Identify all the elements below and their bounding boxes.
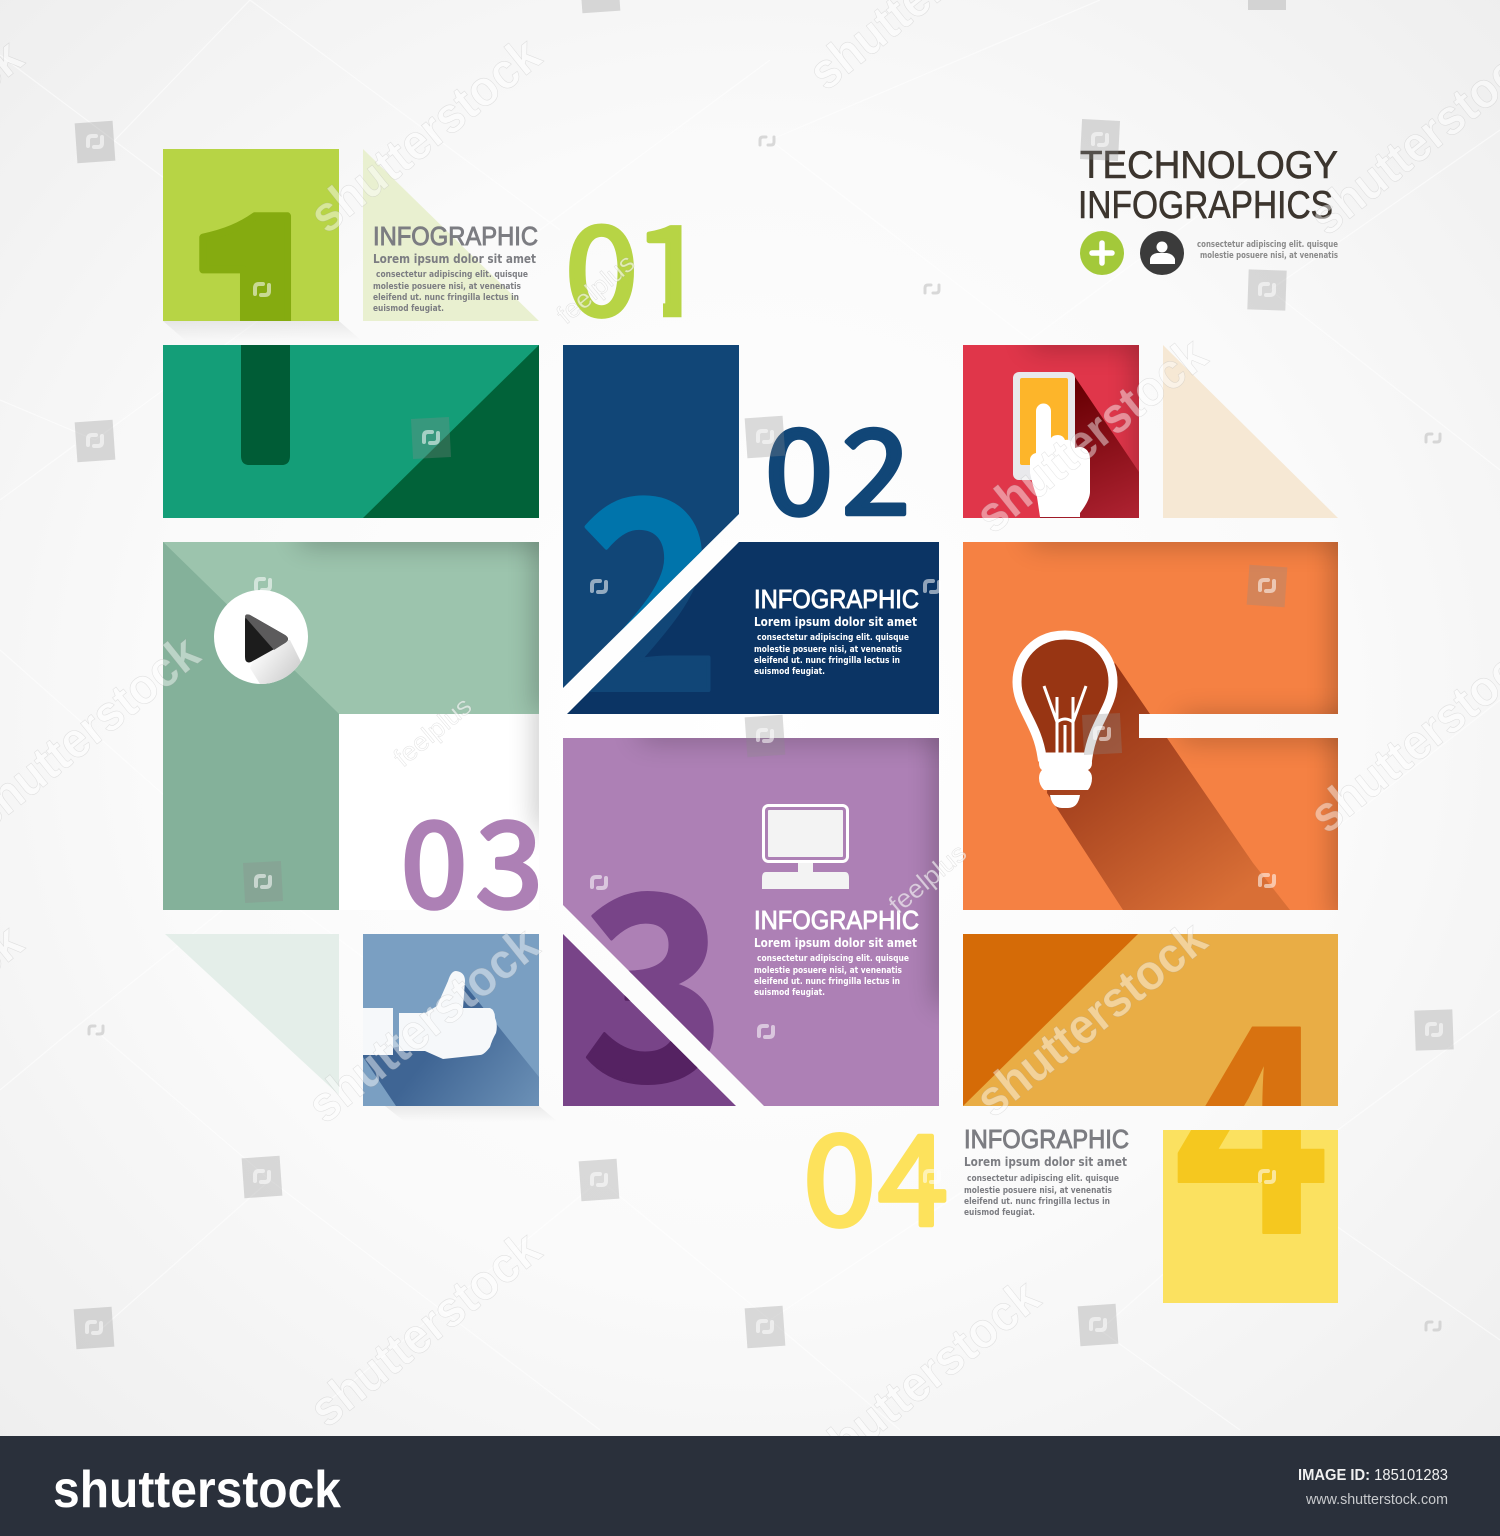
giant numeral 3, lower part: 3 [581,785,726,1154]
panel 1: green square [163,149,339,321]
text block 2: consectetur adipiscing elit. quisque [757,633,909,643]
text block 2: eleifend ut. nunc fringilla lectus in [754,656,900,666]
icon: phone and pointing hand [1013,372,1090,517]
icon shadow: phone [1040,377,1139,518]
panel 1: dark teal triangle [363,345,539,518]
panel 2: navy block [567,542,939,714]
icon: plus badge [1080,231,1124,275]
panel 1: teal rectangle [163,345,539,518]
panel 3: sage light upper band [164,542,539,714]
watermark: feelplus text: feelplus [551,247,640,330]
icon shadow: thumbs up [363,985,539,1106]
text block 1: Lorem ipsum dolor sit amet [373,252,536,266]
panel: beige triangle [1163,345,1338,518]
title: INFOGRAPHICS [1078,184,1333,227]
watermark: shutterstock text: shutterstock [299,26,551,244]
watermark glyph marks [87,134,1441,1333]
text block 3: Lorem ipsum dolor sit amet [754,936,917,950]
text block 1: consectetur adipiscing elit. quisque [376,270,528,280]
panel 3: white notch with shade [524,714,539,836]
text block 2: euismod feugiat. [754,667,825,677]
watermark: shutterstock text: shutterstock [798,1268,1050,1486]
number 02: 2 [842,378,910,548]
giant numeral 4, upper part: 4 [1173,903,1331,1316]
text block 4 [964,1124,1129,1218]
text block 3: INFOGRAPHIC [754,905,919,935]
text block 2: INFOGRAPHIC [754,584,919,614]
watermark: feelplus text: feelplus [883,837,972,920]
panel 1: green square shadow [163,321,362,341]
panel 3: sage block [163,542,539,910]
text block 3: consectetur adipiscing elit. quisque [757,954,909,964]
text block 4: eleifend ut. nunc fringilla lectus in [964,1197,1110,1207]
panel 1: pale triangle [363,149,539,321]
title caption [1197,240,1338,261]
icon: play button [214,590,308,684]
panel: red touch card [963,345,1139,518]
footer image id: IMAGE ID: 185101283 [1298,1467,1448,1484]
watermark: feelplus text: feelplus [388,690,477,773]
icon: monitor [762,806,849,889]
footer url: www.shutterstock.com [1305,1491,1448,1508]
giant numeral 3, upper part: 3 [581,785,726,1154]
title: TECHNOLOGY [1080,144,1338,187]
text block 4: consectetur adipiscing elit. quisque [967,1174,1119,1184]
giant numeral 1, lower part: 1 [170,66,348,565]
icon: person badge [1140,231,1184,275]
watermark: shutterstock text: shutterstock [299,1220,551,1438]
text block 2: Lorem ipsum dolor sit amet [754,615,917,629]
text block 3 [754,905,919,998]
text block 4: euismod feugiat. [964,1208,1035,1218]
giant numeral 2, upper part: 2 [578,387,721,766]
text block 1: INFOGRAPHIC [373,221,538,251]
footer logo: shutterstock [53,1461,341,1519]
panel 2: blue block [563,345,739,688]
text block 3: eleifend ut. nunc fringilla lectus in [754,977,900,987]
title caption: molestie posuere nisi, at venenatis [1200,251,1338,261]
number 03 [401,770,542,941]
number 04: 0 [803,1080,876,1261]
giant numeral 2, lower part: 2 [578,387,721,766]
panel 3: dark purple triangle [563,934,736,1106]
icon: light bulb [1017,635,1113,808]
text block 1 [373,221,538,314]
number 04 [803,1080,948,1261]
watermark: shutterstock text: shutterstock [965,326,1217,544]
text block 2: molestie posuere nisi, at venenatis [754,645,902,655]
number 01: 1 [632,173,711,351]
number 04: 4 [878,1080,948,1261]
watermark: feelplus text [388,247,972,920]
number 03: 3 [476,770,542,941]
text block 3: euismod feugiat. [754,988,825,998]
giant numeral 4, lower part: 4 [1173,903,1331,1316]
icon shadow: light bulb [1047,663,1290,910]
number 03: 0 [401,770,467,941]
text block 4: INFOGRAPHIC [964,1124,1129,1154]
icon: thumbs up [363,971,497,1059]
text block 4: Lorem ipsum dolor sit amet [964,1155,1127,1169]
panel 3: purple block [563,738,939,1106]
title [1078,144,1338,227]
number 02: 0 [765,378,833,548]
text block 3: molestie posuere nisi, at venenatis [754,966,902,976]
number 02 [765,378,910,548]
text block 1: molestie posuere nisi, at venenatis [373,282,521,292]
watermark: shutterstock text: shutterstock [297,916,549,1134]
panel: orange bulb block [963,542,1338,910]
panel 4: amber rectangle [963,934,1338,1106]
panel 4: yellow square [1163,1130,1338,1303]
panel: thumbs-up card shadow [385,1106,558,1122]
watermark: shutterstock text: shutterstock [965,910,1217,1128]
title caption: consectetur adipiscing elit. quisque [1197,240,1338,250]
footer bar [0,1436,1500,1536]
text block 1: eleifend ut. nunc fringilla lectus in [373,293,519,303]
pale green triangle [165,934,339,1095]
giant numeral 1, upper part: 1 [170,66,348,565]
text block 1: euismod feugiat. [373,304,444,314]
panel: thumbs-up card [363,934,539,1106]
number 01 [569,224,682,319]
number 01: 0 [565,173,638,351]
text block 2 [754,584,919,677]
panel 4: dark orange triangle [963,934,1138,1106]
text block 4: molestie posuere nisi, at venenatis [964,1186,1112,1196]
